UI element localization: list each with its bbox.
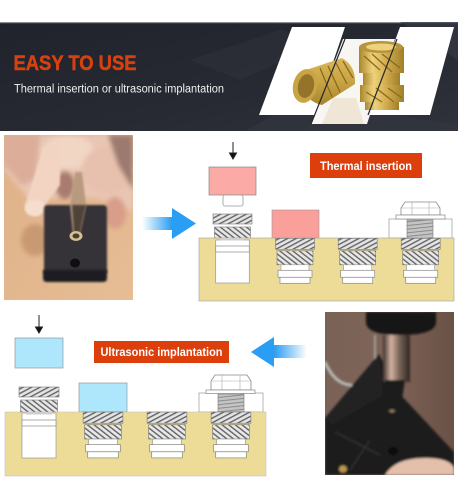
white fixed part with bolt <box>389 202 452 238</box>
banner <box>0 22 458 131</box>
white fixed part with bolt <box>199 375 263 412</box>
loose insert <box>19 387 59 413</box>
loose insert <box>213 214 252 240</box>
banner heading: EASY TO USE <box>14 52 136 75</box>
diagram: thermal insertion <box>199 142 454 301</box>
arrow: blue right <box>142 208 196 239</box>
hole with loose insert position <box>22 412 56 458</box>
diagram: ultrasonic implantation <box>5 315 266 476</box>
label: ultrasonic implantation: Ultrasonic implantation <box>100 347 222 359</box>
icon: brass insert right <box>359 41 404 110</box>
blue block on insert <box>79 383 127 412</box>
arrow: blue left <box>251 337 307 367</box>
press arrow <box>36 315 42 333</box>
blue sonotrode <box>15 338 63 368</box>
embedded inserts <box>83 412 251 458</box>
press arrow <box>230 142 236 159</box>
label: thermal insertion <box>310 153 422 178</box>
label: ultrasonic implantation <box>94 341 229 363</box>
white parallelogram panels <box>259 27 454 124</box>
banner subtitle: Thermal insertion or ultrasonic implantation <box>14 84 224 96</box>
pink heated tool <box>209 167 256 206</box>
photo: ultrasonic tool on black plate <box>325 312 454 475</box>
icon: brass insert left <box>290 58 355 105</box>
label: thermal insertion: Thermal insertion <box>320 161 412 173</box>
photo: hand pressing soldering tool <box>4 135 134 300</box>
embedded inserts <box>276 238 440 283</box>
base material <box>5 412 266 476</box>
base material <box>199 238 454 301</box>
panel slit lines <box>311 39 397 124</box>
hole with loose insert position <box>216 238 249 283</box>
pink block on insert <box>272 210 319 238</box>
